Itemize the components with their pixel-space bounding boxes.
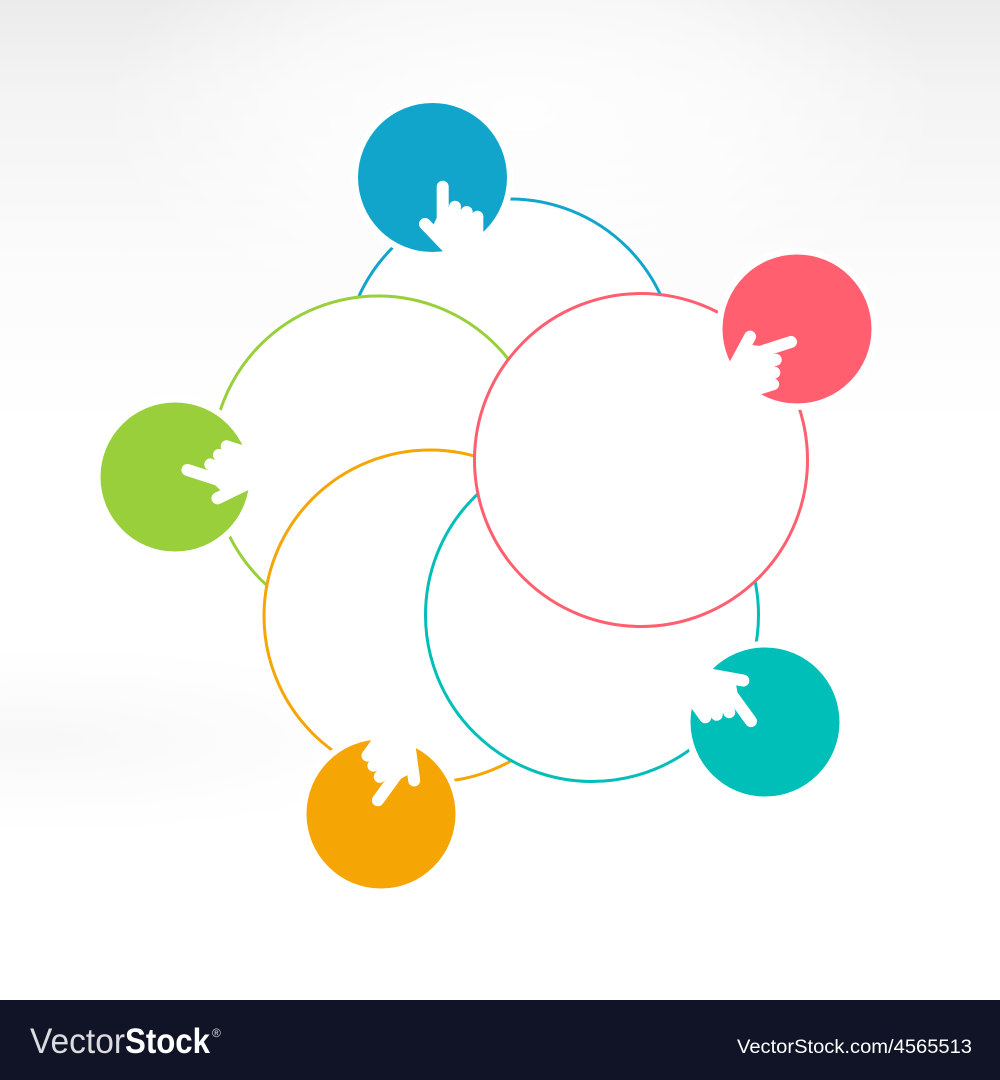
- icon: pointing hand lower left: [345, 715, 437, 811]
- icon: pointing hand left: [182, 431, 272, 510]
- node: blue disc with hand: [352, 96, 514, 262]
- node: green disc with hand: [94, 396, 272, 558]
- diagram: overlapping rings: [212, 199, 808, 782]
- ring: orange: [264, 450, 596, 782]
- ring: teal: [426, 448, 758, 782]
- node: pink disc with hand: [714, 248, 878, 410]
- ring: blue: [344, 199, 676, 531]
- footer logo: Vector: [30, 1022, 125, 1061]
- footer logo: Stock: [125, 1022, 210, 1061]
- footer image id: VectorStock.com/4565513: [737, 1037, 972, 1058]
- ring: pink: [474, 294, 808, 626]
- icon: pointing hand right: [714, 325, 804, 404]
- node: orange disc with hand: [300, 715, 462, 895]
- footer logo: ®: [212, 1026, 221, 1040]
- node: teal disc with hand: [674, 641, 846, 803]
- ring: green: [212, 296, 544, 628]
- footer bar: [0, 1000, 1000, 1080]
- icon: pointing hand up: [425, 187, 483, 262]
- icon: pointing hand lower right: [674, 650, 765, 745]
- footer logo: [30, 1022, 221, 1061]
